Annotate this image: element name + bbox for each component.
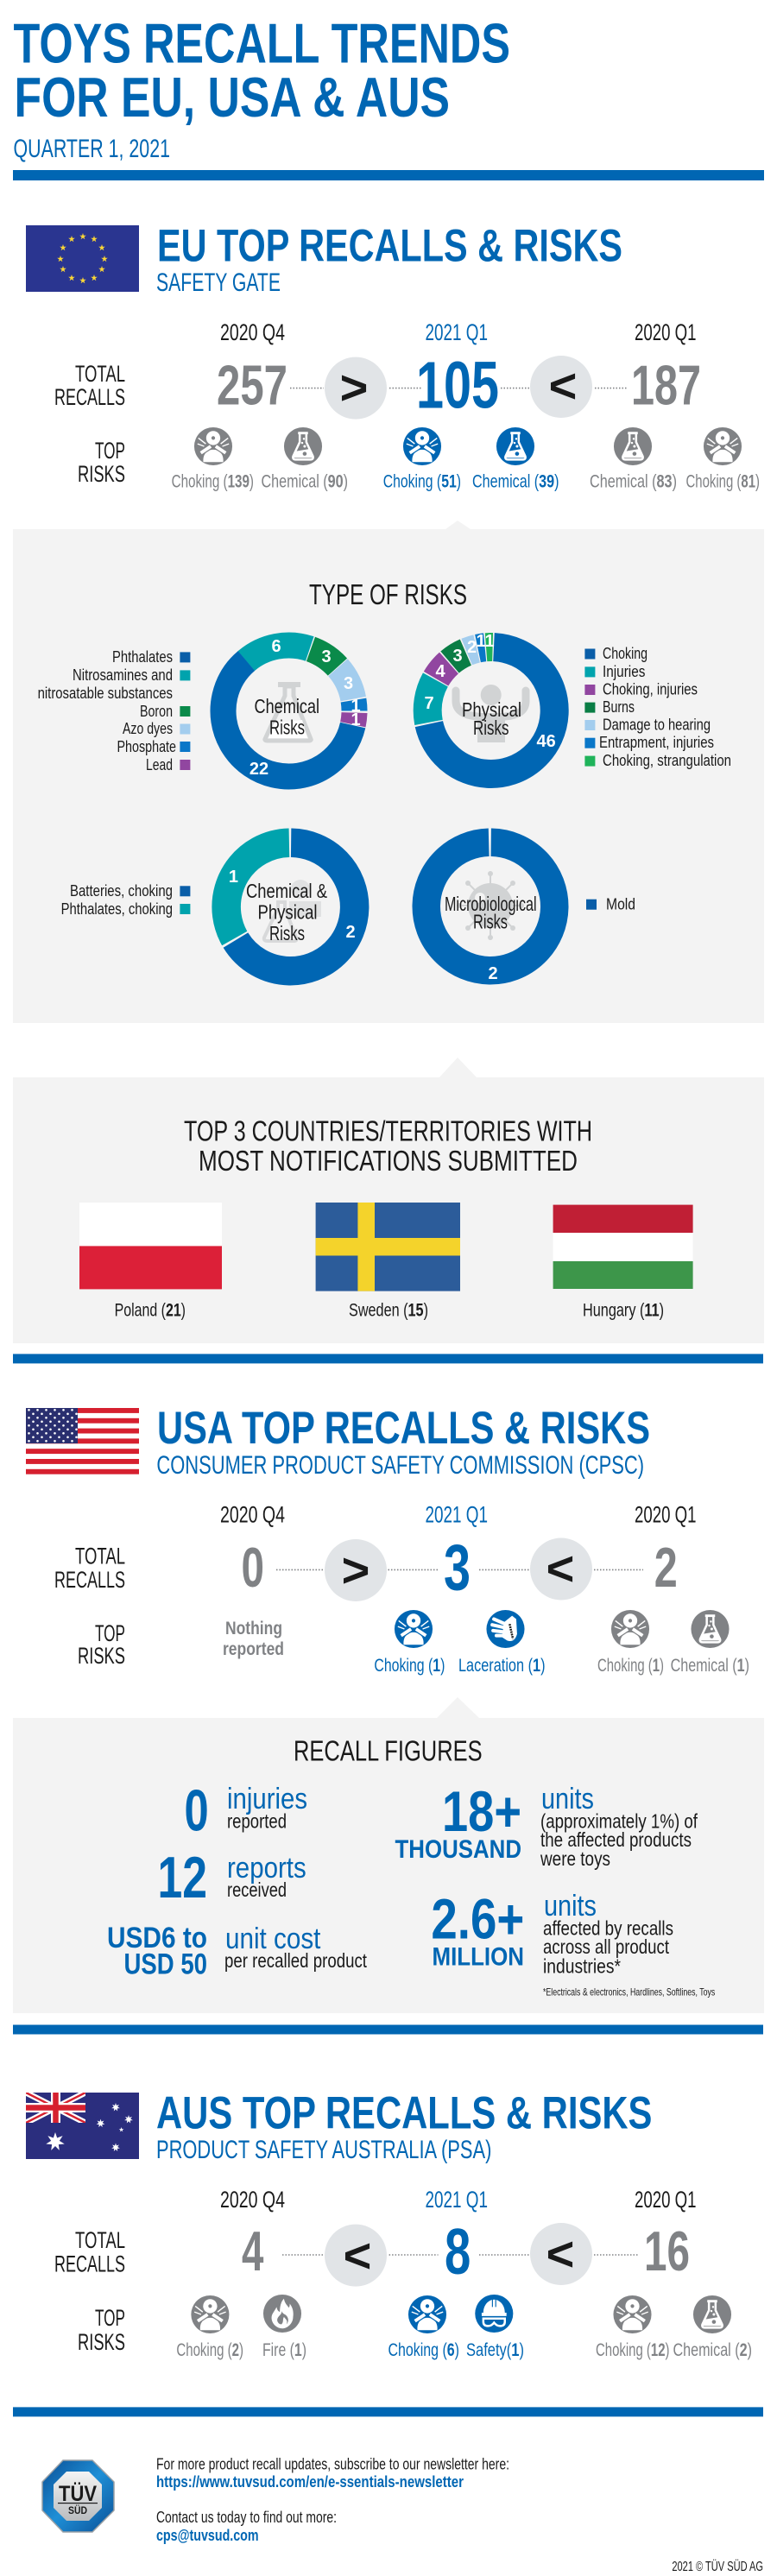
flag: Poland [79, 1203, 222, 1289]
footer: newsletter [156, 2456, 509, 2491]
figure: 2.6+ million units: units [544, 1890, 597, 1923]
risk labels: Choking (12) [596, 2339, 670, 2360]
figure: 2.6+ million units: 2.6+ [431, 1887, 524, 1951]
figure: 2.6+ million units: affected by recalls [543, 1917, 673, 1940]
year labels [220, 1502, 696, 1528]
year labels: 2020 Q4 [220, 319, 285, 345]
year labels: 2020 Q1 [635, 2187, 696, 2213]
number: 16: 16 [644, 2219, 690, 2282]
legend: physical risks: Choking, injuries [603, 680, 698, 698]
number: 187: 187 [631, 354, 701, 416]
legend: chemical risks: Phthalates [112, 648, 173, 666]
title: FOR EU, USA & AUS [14, 66, 450, 129]
flag: Hungary [553, 1205, 693, 1289]
heading: recall figures: RECALL FIGURES [294, 1734, 483, 1766]
icon: Australia flag [26, 2093, 139, 2159]
legend: chemical and physical risks [61, 882, 190, 918]
donut: physical risks: 1 [484, 632, 495, 651]
icon: choking [194, 427, 232, 465]
figure: 12 reports [157, 1845, 306, 1910]
label: top risks: TOP [95, 438, 125, 464]
year labels [220, 319, 696, 345]
icon: choking [611, 1610, 649, 1648]
figure: 18+ thousand units: THOUSAND [395, 1835, 521, 1864]
title [14, 12, 510, 129]
donut: chemical and physical risks: Chemical & [246, 880, 327, 902]
label: top risks: RISKS [78, 2329, 125, 2355]
legend: microbiological risks: Mold [606, 896, 635, 913]
icon: choking highlighted [408, 2295, 446, 2333]
heading: top 3 countries [184, 1115, 592, 1177]
icon: chemical [284, 427, 322, 465]
label: top risks: TOP [95, 2305, 125, 2331]
risk labels: Choking (139) [172, 471, 254, 492]
year labels: 2020 Q4 [220, 2187, 285, 2213]
donut: chemical and physical risks: Risks [269, 922, 305, 944]
legend: chemical risks: Azo dyes [123, 720, 173, 737]
figure: 2.6+ million units [431, 1887, 673, 1978]
subheading: PSA: PRODUCT SAFETY AUSTRALIA (PSA) [156, 2136, 491, 2164]
legend: physical risks: Damage to hearing [603, 717, 711, 734]
risk labels: Choking (81) [685, 471, 760, 492]
figure: 0 injuries: 0 [185, 1777, 209, 1843]
figure: 18+ thousand units [395, 1779, 698, 1870]
donut: physical risks: 7 [424, 694, 434, 713]
icon: laceration highlighted [486, 1610, 525, 1648]
section: EU top recalls [26, 221, 760, 492]
donut: chemical risks: Chemical [254, 695, 319, 717]
label: top risks: RISKS [78, 461, 125, 487]
number: 8: 8 [445, 2215, 471, 2288]
label: top risks: TOP [95, 1620, 125, 1646]
comparison: circles and dotted connectors: > [342, 1543, 370, 1597]
label: top risks [78, 438, 125, 487]
year labels: 2020 Q4 [220, 1502, 285, 1528]
footer: contact: cps@tuvsud.com [156, 2527, 259, 2544]
donut: chemical risks: 22 [250, 760, 268, 779]
icon: USA flag [26, 1408, 139, 1474]
comparison: circles and dotted connectors [282, 2223, 638, 2287]
country labels: Hungary (11) [583, 1300, 664, 1321]
subtitle: quarter: QUARTER 1, 2021 [14, 135, 170, 163]
risk labels: Laceration (1) [458, 1655, 546, 1676]
figure: unit cost: unit cost [225, 1923, 321, 1955]
figure: 0 injuries: reported [227, 1809, 287, 1832]
risk labels: Choking (1) [597, 1655, 664, 1676]
legend: chemical risks [38, 648, 190, 773]
heading: top 3 countries: MOST NOTIFICATIONS SUBMITTED [199, 1145, 578, 1177]
legend: chemical risks: Nitrosamines and [73, 666, 173, 684]
note: nothing reported: reported [223, 1639, 284, 1659]
number: 4: 4 [242, 2219, 263, 2282]
legend: chemical risks: Boron [140, 703, 173, 720]
icon: choking [704, 427, 742, 465]
heading: top 3 countries: TOP 3 COUNTRIES/TERRITORIES WITH [184, 1115, 592, 1146]
logo: TÜV SÜD: TÜV [59, 2481, 97, 2506]
panel: recall figures [13, 1697, 764, 2013]
figure: 2.6+ million units: across all product [543, 1935, 669, 1958]
donut: microbiological risks [425, 841, 556, 983]
donut: physical risks: 1 [476, 632, 486, 651]
comparison: circles and dotted connectors [276, 1538, 643, 1601]
figure: 0 injuries: injuries [227, 1783, 307, 1815]
legend: microbiological risks [586, 896, 635, 913]
footer: newsletter: For more product recall updates, subscribe to our newsletter here: [156, 2456, 509, 2473]
figure: 18+ thousand units: units [541, 1783, 594, 1815]
footer: contact [156, 2509, 337, 2544]
donut: chemical risks: 3 [321, 647, 332, 666]
donut: physical risks [401, 621, 580, 800]
risk labels: Choking (1) [374, 1655, 445, 1676]
donut: microbiological risks: Microbiological [445, 893, 537, 915]
risk labels: Chemical (2) [673, 2339, 752, 2360]
donut: chemical and physical risks: Physical [257, 901, 318, 924]
legend: physical risks: Injuries [603, 663, 645, 680]
heading: EU: EU TOP RECALLS & RISKS [157, 221, 622, 271]
footer: contact: Contact us today to find out more: [156, 2509, 337, 2526]
donut: chemical risks: 1 [351, 697, 361, 716]
year labels: 2021 Q1 [425, 319, 488, 345]
heading: type of risks: TYPE OF RISKS [309, 578, 467, 610]
figure: 2.6+ million units: MILLION [432, 1943, 524, 1972]
icon: choking highlighted [395, 1610, 433, 1648]
icon: chemical [614, 427, 652, 465]
comparison: circles and dotted connectors: > [340, 360, 368, 414]
flag: Sweden [316, 1203, 460, 1291]
figure: 18+ thousand units: the affected products [540, 1828, 692, 1851]
comparison: circles and dotted connectors [290, 356, 628, 420]
figure: 0 injuries [185, 1777, 307, 1843]
legend: chemical and physical risks: Batteries, choking [70, 882, 173, 900]
icon: fire [263, 2295, 301, 2333]
icon: EU flag [26, 225, 139, 292]
risk labels [374, 1655, 749, 1676]
donut: microbiological risks: 2 [488, 964, 498, 983]
figure: 12 reports: 12 [157, 1845, 207, 1910]
comparison: circles and dotted connectors: < [546, 2226, 574, 2281]
heading: AUS: AUS TOP RECALLS & RISKS [156, 2087, 652, 2139]
title: TOYS RECALL TRENDS [14, 12, 510, 74]
figure: 18+ thousand units: were toys [540, 1847, 610, 1870]
panel: top 3 countries [13, 1058, 764, 1343]
legend: physical risks: Choking [603, 645, 648, 662]
number: 0: 0 [242, 1536, 264, 1599]
footer: newsletter: https://www.tuvsud.com/en/e-ssentials-newsletter [156, 2473, 464, 2491]
icon: chemical [691, 1610, 730, 1648]
label: total recalls: RECALLS [54, 1567, 125, 1593]
logo: TÜV SÜD: SÜD [68, 2503, 87, 2516]
year labels: 2020 Q1 [635, 1502, 696, 1528]
figure: 2.6+ million units: industries* [543, 1955, 621, 1978]
figure: unit cost: per recalled product [224, 1949, 367, 1972]
note: nothing reported [223, 1619, 284, 1659]
risk labels: Chemical (1) [671, 1655, 749, 1676]
label: top risks [78, 2305, 125, 2355]
icon: chemical highlighted [496, 427, 534, 465]
figure: 18+ thousand units: 18+ [442, 1779, 521, 1843]
risk labels: Choking (6) [388, 2339, 459, 2360]
label: total recalls: RECALLS [54, 384, 125, 410]
risk labels: Chemical (90) [261, 471, 348, 492]
donut: physical risks: 3 [452, 647, 463, 666]
risk labels: Safety(1) [466, 2339, 524, 2360]
icon: chemical [693, 2295, 731, 2333]
note: nothing reported: Nothing [225, 1619, 282, 1638]
donut: physical risks: 46 [536, 732, 556, 751]
donut: chemical and physical risks: 1 [229, 868, 238, 887]
donut: physical risks: 4 [435, 662, 445, 681]
donut: chemical risks [196, 618, 382, 804]
number: 3: 3 [444, 1531, 471, 1604]
icon: choking highlighted [403, 427, 441, 465]
year labels: 2020 Q1 [635, 319, 696, 345]
risk labels: Choking (2) [176, 2339, 243, 2360]
icon: safety helmet highlighted [475, 2295, 513, 2333]
donut: chemical and physical risks: 2 [345, 923, 356, 942]
label: top risks: RISKS [78, 1643, 125, 1669]
risk labels: Fire (1) [262, 2339, 306, 2360]
donut: physical risks: 2 [467, 638, 477, 657]
legend: physical risks: Entrapment, injuries [599, 734, 714, 751]
comparison: circles and dotted connectors: < [546, 1541, 574, 1595]
label: total recalls [54, 2227, 125, 2277]
country labels: Poland (21) [115, 1300, 186, 1321]
label: total recalls: TOTAL [75, 1544, 125, 1569]
legend: chemical risks: Lead [146, 756, 173, 773]
subheading: safety gate: SAFETY GATE [156, 268, 281, 297]
icon: choking [613, 2295, 652, 2333]
year labels: 2021 Q1 [425, 2187, 488, 2213]
label: total recalls: TOTAL [75, 361, 125, 387]
number: 2: 2 [654, 1536, 678, 1599]
donut: chemical risks: 3 [344, 674, 353, 693]
label: top risks [78, 1620, 125, 1669]
figure: 12 reports: reports [227, 1852, 306, 1885]
donut: chemical risks: 6 [271, 637, 281, 656]
legend: chemical risks: nitrosatable substances [38, 685, 173, 702]
legend: chemical risks: Phosphate [117, 738, 176, 755]
logo: TÜV SÜD [42, 2460, 114, 2532]
legend: physical risks [584, 645, 731, 769]
donut: chemical risks: 1 [351, 710, 361, 729]
risk labels [172, 471, 760, 492]
donut: physical risks: Risks [473, 717, 509, 739]
number: 257: 257 [217, 354, 287, 416]
comparison: circles and dotted connectors: < [549, 358, 577, 413]
figure: 18+ thousand units: (approximately 1%) of [540, 1809, 698, 1832]
label: total recalls [54, 1544, 125, 1593]
legend: chemical and physical risks: Phthalates, choking [61, 900, 173, 918]
label: total recalls: RECALLS [54, 2251, 125, 2277]
label: total recalls [54, 361, 125, 410]
donut: microbiological risks: Risks [473, 910, 508, 932]
figure: 12 reports: received [227, 1878, 287, 1901]
donut: chemical risks: Risks [269, 716, 305, 738]
year labels [220, 2187, 696, 2213]
figure: unit cost [107, 1922, 367, 1980]
risk labels [176, 2339, 752, 2360]
country labels: Sweden (15) [349, 1300, 428, 1321]
figure: unit cost: USD 50 [124, 1948, 207, 1980]
icon: choking [191, 2295, 229, 2333]
section: AUS top recalls [26, 2087, 752, 2360]
legend: physical risks: Burns [603, 698, 635, 716]
comparison: circles and dotted connectors: < [344, 2228, 371, 2282]
heading: USA: USA TOP RECALLS & RISKS [157, 1403, 650, 1454]
legend: physical risks: Choking, strangulation [603, 752, 731, 769]
donut: chemical and physical risks [203, 820, 377, 994]
year labels: 2021 Q1 [425, 1502, 488, 1528]
risk labels: Chemical (39) [472, 471, 559, 492]
panel: type of risks [13, 521, 764, 1023]
figure: unit cost: USD6 to [107, 1922, 207, 1954]
country labels [115, 1300, 664, 1321]
number: 105: 105 [416, 349, 499, 423]
risk labels: Chemical (83) [590, 471, 677, 492]
footnote: *Electricals & electronics, Hardlines, Softlines, Toys [543, 1986, 715, 1998]
donut: physical risks: Physical [462, 698, 521, 721]
section: USA top recalls [26, 1403, 749, 1676]
label: total recalls: TOTAL [75, 2227, 125, 2253]
risk labels: Choking (51) [383, 471, 461, 492]
